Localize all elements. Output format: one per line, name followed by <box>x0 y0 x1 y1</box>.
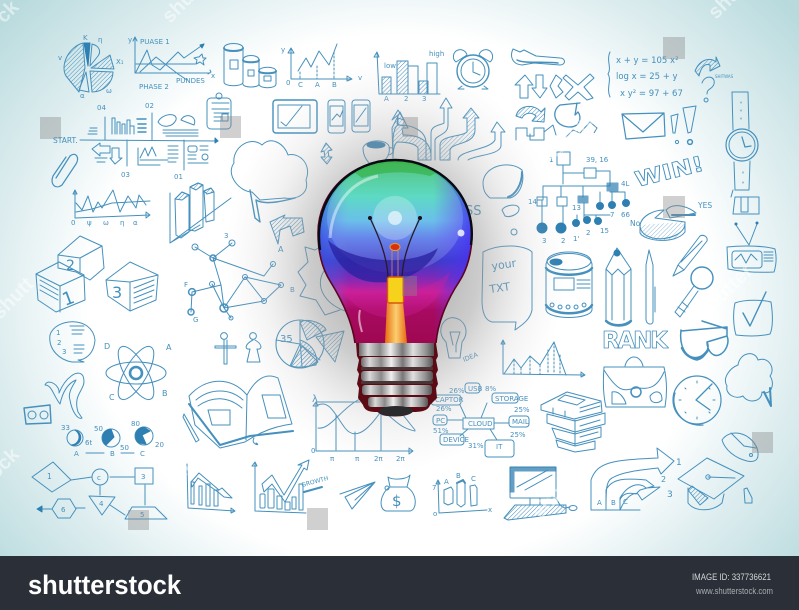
icon: three ring gauges: 80 <box>131 420 140 428</box>
icon: flow chart: 1 <box>47 472 52 481</box>
icon: three ring gauges: 33 <box>61 424 70 432</box>
watermark text: shutt <box>160 443 210 494</box>
chart: wave chart: α <box>133 219 138 227</box>
chart: mind map: 25% <box>510 431 526 439</box>
icon: three ring gauges: 50 <box>94 425 103 433</box>
footer bar <box>0 556 799 610</box>
chart: organisation tree: 39, 16 <box>586 156 609 164</box>
chart: organisation tree: 1 <box>549 156 553 164</box>
icon: flow chart: 6 <box>61 506 66 514</box>
icon: money bag <box>381 475 415 511</box>
chart: bar chart: A <box>384 95 389 103</box>
chart: wave line chart: 2π <box>396 455 405 463</box>
icon: exclamation marks <box>671 106 696 144</box>
chart: mind map: MAIL <box>512 418 529 426</box>
icon: speech bubble your text: TXT <box>488 280 511 296</box>
icon: branching arrows: A <box>597 499 602 507</box>
icon: branching arrows: 3 <box>667 490 673 500</box>
chart: wave chart: 0 <box>71 219 75 227</box>
icon: 3D pie chart: YES <box>697 201 712 210</box>
chart: mind map: 25% <box>514 406 530 414</box>
icon: arrow and question mark <box>695 57 734 102</box>
chart: organisation tree: 2 <box>586 229 590 237</box>
timeline: start roadmap: 04 <box>97 104 106 112</box>
chart: organisation tree <box>528 152 630 245</box>
chart: line chart with phases: PUNDES <box>176 77 205 85</box>
icon: rainbow lightbulb <box>318 160 472 416</box>
footer logo: shutterstock <box>28 570 182 600</box>
icon: flow chart: 3 <box>141 473 145 481</box>
chart: mind map: STORAGE <box>495 395 528 403</box>
chart: peak line chart: B <box>332 81 337 89</box>
icon: three ring gauges: 50 <box>120 444 129 452</box>
icon: speech bubble list: 2 <box>57 339 61 347</box>
timeline: start roadmap: 03 <box>121 171 130 179</box>
chart: bar chart: low <box>384 62 396 70</box>
chart: organisation tree: 13 <box>572 204 581 212</box>
icon: speech bubble list: 3 <box>62 348 66 356</box>
icon: pie chart: K <box>83 34 88 42</box>
icon: pie chart <box>58 34 124 100</box>
icon: paper clip <box>52 154 78 187</box>
bulb glass <box>318 160 472 345</box>
icon: gear <box>298 244 348 315</box>
icon: cloud outline <box>231 141 308 222</box>
text: RANK: RANK <box>602 328 669 354</box>
chart: three 3D bars: C <box>471 475 476 483</box>
icon: slanted pencil <box>673 235 707 276</box>
chart: mind map: CLOUD <box>468 420 493 428</box>
icon: three ring gauges: 6t <box>85 439 92 447</box>
icon: open book <box>183 376 293 448</box>
icon: atom <box>104 342 172 404</box>
icon: wristwatch <box>726 92 759 214</box>
icon: envelope <box>622 113 665 139</box>
chart: network graph: G <box>193 316 198 324</box>
chart: network graph: B <box>290 286 295 294</box>
timeline: start roadmap: 02 <box>145 102 154 110</box>
chart: peak line chart <box>281 44 362 89</box>
chart: wave line chart: 2π <box>374 455 383 463</box>
bulb screw base <box>356 343 438 416</box>
chart: three 3D bars <box>432 472 492 518</box>
icon: flow chart: c <box>97 474 101 482</box>
icon: branching arrows <box>591 448 682 510</box>
chart: peak line chart: 0 <box>286 79 290 87</box>
chart: three 3D bars: A <box>444 478 449 486</box>
icon: smartphone chart <box>328 100 345 133</box>
icon: four branching arrows <box>392 98 505 160</box>
icon: small pie fragments <box>300 320 344 367</box>
chart: organisation tree: 1' <box>573 235 579 243</box>
icon: three ring gauges: B <box>110 450 115 458</box>
text: equations: x y² = 97 + 67 <box>620 89 683 99</box>
chart: mind map: 26% <box>449 387 465 395</box>
chart: mind map: CAPTOR <box>435 396 464 404</box>
icon: stack of books <box>541 392 605 452</box>
icon: pebbles and SS <box>465 165 523 235</box>
chart: bar chart: 2 <box>404 95 408 103</box>
chart: line chart with phases: PUASE 1 <box>140 38 170 46</box>
icon: money bag: $ <box>392 492 402 510</box>
chart: organisation tree: 2 <box>561 237 565 245</box>
chart: line chart with phases: PHASE 2 <box>139 83 169 91</box>
icon: atom: C <box>109 393 115 402</box>
icon: hatched arrow <box>270 215 304 244</box>
chart: network graph: F <box>184 281 188 289</box>
chart: network graph: 3 <box>224 232 228 240</box>
chart: mind map: 51% <box>433 427 449 435</box>
icon: small down arrow <box>321 143 332 164</box>
chart: three 3D bars: 7 <box>432 484 436 492</box>
icon: paper plane <box>340 482 375 509</box>
chart: organisation tree: 15 <box>600 227 609 235</box>
text: WIN!: WIN! <box>632 152 706 192</box>
chart: mind map <box>431 383 530 457</box>
chart: mountain chart <box>501 340 585 377</box>
icon: pie chart: ω <box>106 87 112 95</box>
chart: wave line chart: π <box>330 455 335 463</box>
icon: briefcase <box>603 357 666 407</box>
footer image id: IMAGE ID: 337736621 <box>692 572 771 583</box>
icon: computer and keyboard <box>504 467 577 520</box>
chart: network graph <box>184 232 295 324</box>
icon: speech bubble list <box>50 322 95 362</box>
icon: mouse <box>722 433 758 461</box>
icon: branching arrows: B <box>611 499 616 507</box>
chart: wave line chart: λ <box>312 394 318 405</box>
chart: peak line chart: y <box>281 46 285 54</box>
icon: 3D pie chart <box>630 201 712 240</box>
icon: atom: D <box>104 342 110 351</box>
chart: organisation tree: 66 <box>621 211 630 219</box>
timeline: start roadmap: START. <box>53 136 78 145</box>
chart: wave line chart: π <box>355 455 360 463</box>
icon: pie chart: v <box>58 54 62 62</box>
icon: pebbles and SS: SS <box>465 204 482 219</box>
icon: small lightbulb: IDEA <box>462 350 480 364</box>
footer url: www.shutterstock.com <box>695 586 773 596</box>
icon: retro TV <box>727 222 776 272</box>
chart: three 3D bars: x <box>488 506 492 514</box>
chart: three 3D bars: B <box>456 472 461 480</box>
icon: three ring gauges: C <box>140 450 145 458</box>
icon: three ring gauges <box>61 420 164 458</box>
watermark text: shuttersto <box>528 439 613 524</box>
chart: line chart with phases <box>128 36 215 91</box>
icon: pen <box>646 250 655 324</box>
icon: speech bubble your text <box>482 246 532 330</box>
chart: falling bar chart <box>187 464 235 513</box>
chart: pie 35 <box>276 320 324 368</box>
icon: speech bubble list: 1 <box>56 329 60 337</box>
panel: doodle sketches <box>24 34 776 520</box>
chart: organisation tree: 4L <box>621 180 629 188</box>
chart: mind map: IT <box>496 443 503 451</box>
icon: pencil <box>606 248 631 326</box>
icon: atom: B <box>162 389 168 398</box>
icon: glasses badge GO <box>24 405 51 424</box>
icon: coffee cup <box>363 141 393 164</box>
chart: organisation tree: 14 <box>528 198 537 206</box>
chart: mind map: 8% <box>485 385 496 393</box>
icon: 3D pie chart: No <box>630 219 641 228</box>
icon: flow chart: 5 <box>140 511 144 519</box>
icon: flow chart: 4 <box>99 500 104 508</box>
icon: stick figures <box>215 333 261 364</box>
icon: number cubes: 2 <box>66 258 75 274</box>
icon: branching arrows: C <box>623 498 628 506</box>
chart: pie 35: 35 <box>280 334 293 345</box>
text: equations: log x = 25 + y <box>616 72 678 82</box>
timeline: start roadmap <box>53 102 218 181</box>
chart: mind map: PC <box>436 417 445 425</box>
icon: number cubes: 1 <box>60 287 77 311</box>
chart: mind map: USB <box>468 385 483 393</box>
icon: branching arrows: 1 <box>676 458 682 468</box>
chart: network graph: A <box>278 245 284 254</box>
chart: mind map: 26% <box>436 405 452 413</box>
icon: speech bubble your text: your <box>491 257 517 273</box>
icon: number cubes <box>36 236 158 312</box>
text: equations: x + y = 105 x² <box>616 56 678 66</box>
chart: wave chart <box>71 190 150 227</box>
chart: mind map: DEVICE <box>443 436 469 444</box>
chart: bar chart: 3 <box>422 95 426 103</box>
chart: wave chart: ψ <box>87 219 92 227</box>
chart: peak line chart: A <box>315 81 320 89</box>
chart: organisation tree: 3 <box>542 237 546 245</box>
icon: three ring gauges: A <box>74 450 79 458</box>
icon: paint can <box>546 252 592 318</box>
chart: wave line chart <box>311 394 415 463</box>
chart: bar chart: high <box>429 50 444 58</box>
chart: peak line chart: C <box>298 81 303 89</box>
icon: wall clock <box>673 376 721 425</box>
chart: wave chart: ω <box>103 219 109 227</box>
chart: wave line chart: 0 <box>311 447 315 455</box>
icon: graduation cap <box>678 458 752 510</box>
icon: cloud <box>725 354 772 406</box>
icon: smartphone <box>352 100 370 132</box>
chart: 3D bar chart <box>170 183 231 243</box>
icon: atom: A <box>166 343 172 352</box>
chart: growth chart <box>252 460 329 513</box>
chart: peak line chart: v <box>358 74 362 82</box>
icon: alarm clock <box>453 50 493 89</box>
chart: line chart with phases: x <box>211 72 215 80</box>
shadow behind bulb <box>225 60 565 470</box>
text: equations <box>608 52 683 99</box>
icon: checkbox <box>734 292 772 336</box>
icon: clipboard <box>207 93 231 129</box>
icon: arrows set <box>515 74 597 140</box>
icon: small lightbulb <box>441 318 480 364</box>
icon: pie chart: X₁ <box>116 58 124 66</box>
chart: organisation tree: 7 <box>610 211 614 219</box>
icon: three ring gauges: 20 <box>155 441 164 449</box>
icon: pie chart: η <box>98 36 102 44</box>
watermark text: shutterst <box>528 102 604 179</box>
icon: cylinders <box>224 44 276 88</box>
chart: growth chart: GROWTH <box>301 475 329 489</box>
icon: arrow and question mark: SHITWAS <box>715 74 734 79</box>
chart: bar chart <box>374 50 444 103</box>
chart: wave chart: η <box>120 219 124 227</box>
icon: branching arrows: 2 <box>661 475 666 484</box>
icon: wrench <box>512 49 564 65</box>
watermark tiles <box>40 37 773 530</box>
icon: number-three ribbon <box>45 373 84 418</box>
icon: glasses <box>681 321 728 360</box>
chart: mind map: 31% <box>468 442 484 450</box>
chart: line chart with phases: y <box>128 36 132 44</box>
icon: number cubes: 3 <box>112 283 122 302</box>
icon: magnifier <box>675 267 713 317</box>
watermark text: shutter <box>694 260 758 324</box>
icon: flow chart <box>32 462 167 519</box>
bulb filament <box>368 216 422 343</box>
chart: three 3D bars: o <box>433 510 437 518</box>
icon: pie chart: α <box>80 92 85 100</box>
timeline: start roadmap: 01 <box>174 173 183 181</box>
icon: tablet <box>273 100 317 133</box>
